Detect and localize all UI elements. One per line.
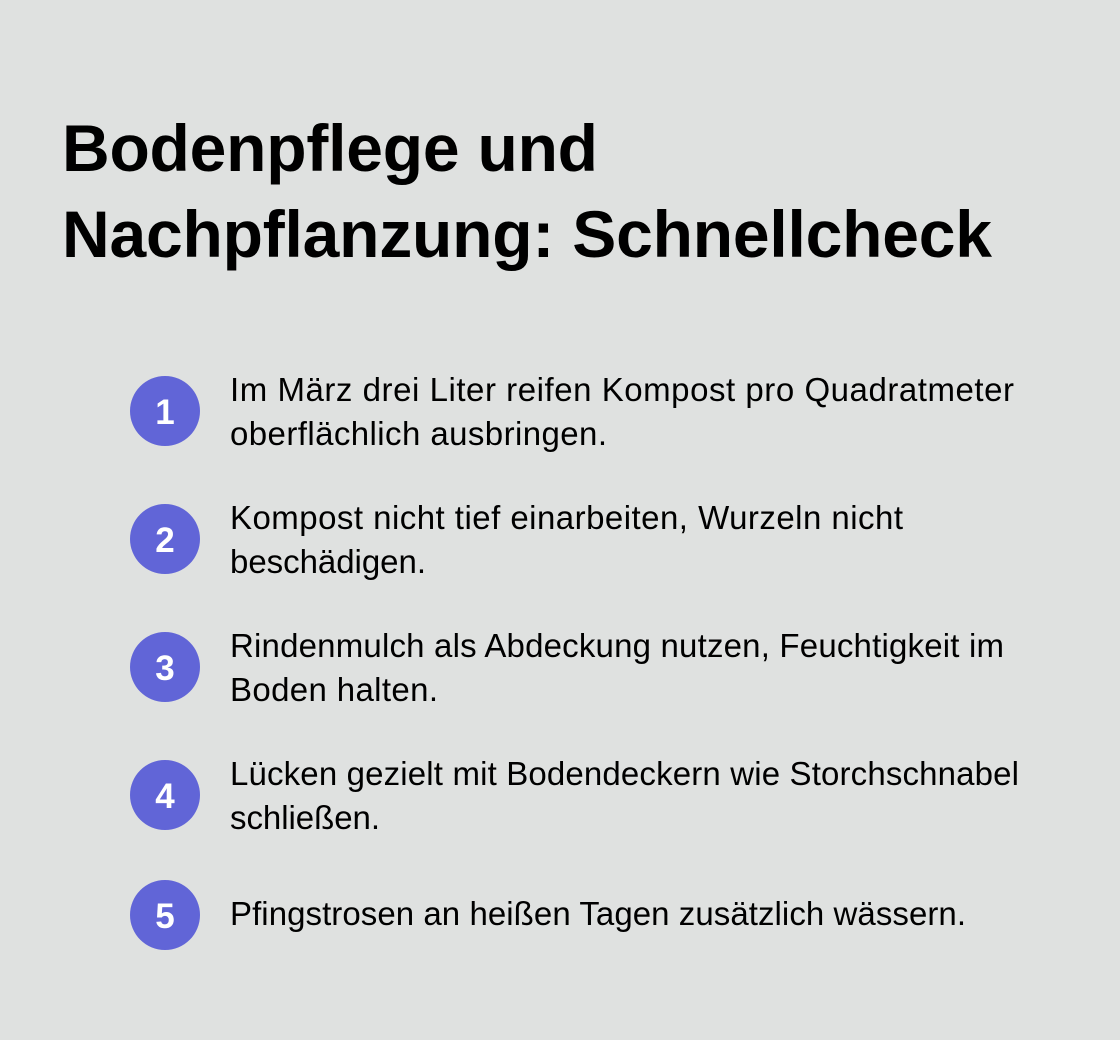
step 1 text: Im März drei Liter reifen Kompost pro Quadratmeter	[230, 371, 1014, 408]
step 4	[130, 755, 1019, 836]
step 3 text: Boden halten.	[230, 671, 438, 708]
step 2	[130, 499, 903, 580]
title	[62, 111, 992, 271]
step 4 text: Lücken gezielt mit Bodendeckern wie Storchschnabel	[230, 755, 1019, 792]
step 5	[130, 880, 966, 950]
step 4 text: schließen.	[230, 799, 380, 836]
step 1	[130, 371, 1014, 452]
step 3 text: Rindenmulch als Abdeckung nutzen, Feuchtigkeit im	[230, 627, 1004, 664]
number badge 1: 1	[155, 393, 175, 432]
number badge 4	[130, 760, 200, 830]
number badge 1	[130, 376, 200, 446]
step 2 text: Kompost nicht tief einarbeiten, Wurzeln nicht	[230, 499, 903, 536]
step 3 text	[230, 627, 1004, 708]
checklist	[130, 371, 1019, 950]
number badge 2	[130, 504, 200, 574]
step 4 text	[230, 755, 1019, 836]
step 5 text: Pfingstrosen an heißen Tagen zusätzlich wässern.	[230, 895, 966, 932]
title: Bodenpflege und	[62, 111, 598, 185]
number badge 3	[130, 632, 200, 702]
step 2 text: beschädigen.	[230, 543, 426, 580]
step 1 text	[230, 371, 1014, 452]
number badge 4: 4	[155, 777, 175, 816]
number badge 5	[130, 880, 200, 950]
step 3	[130, 627, 1004, 708]
step 1 text: oberflächlich ausbringen.	[230, 415, 607, 452]
step 2 text	[230, 499, 903, 580]
number badge 3: 3	[155, 649, 175, 688]
number badge 5: 5	[155, 897, 175, 936]
number badge 2: 2	[155, 521, 175, 560]
title: Nachpflanzung: Schnellcheck	[62, 197, 992, 271]
